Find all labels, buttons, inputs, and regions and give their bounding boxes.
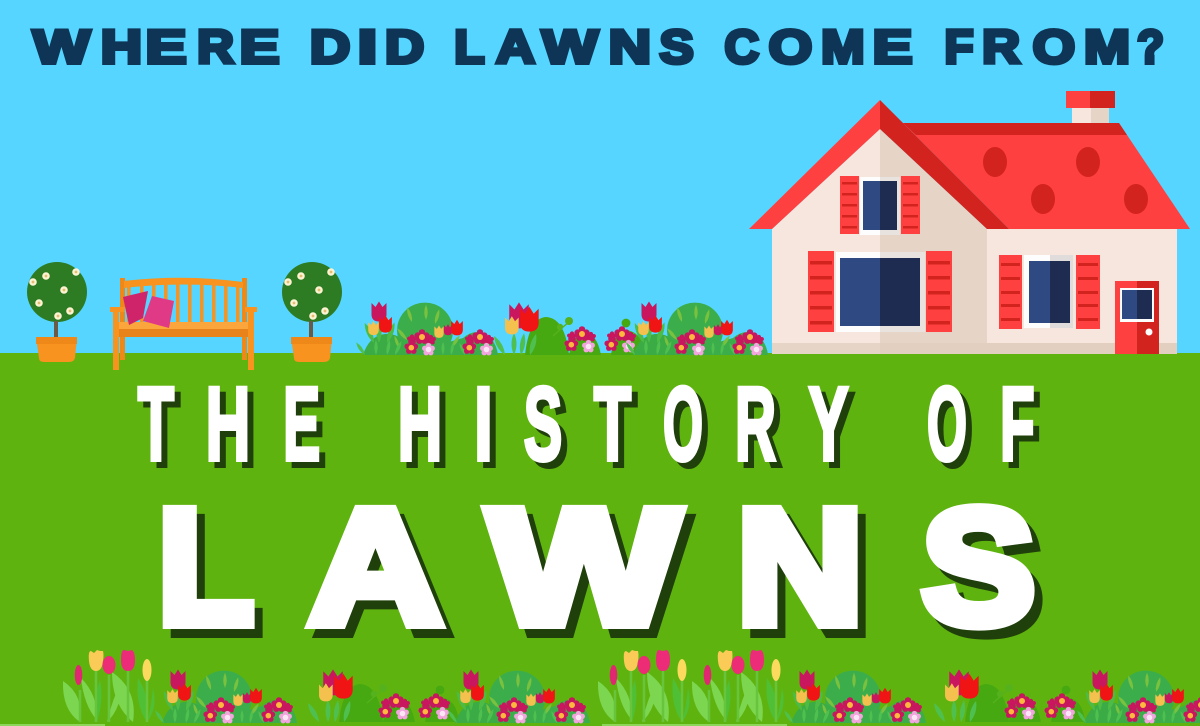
chimney	[1066, 91, 1115, 123]
upper window	[840, 176, 920, 235]
title: where did lawns come from: M	[1084, 21, 1130, 74]
title: where did lawns come from: H	[101, 21, 142, 74]
title: where did lawns come from: W	[33, 21, 90, 74]
subtitle: the history of: H	[398, 366, 442, 483]
subtitle: the history of: O	[927, 366, 967, 483]
title: where did lawns come from: R	[197, 21, 234, 74]
subtitle: the history of: T	[594, 366, 631, 483]
flower bed along the horizon	[355, 302, 768, 356]
flower group centre	[492, 302, 645, 356]
title: where did lawns come from: D	[385, 21, 424, 74]
title: where did lawns come from: E	[146, 21, 186, 74]
subtitle: the history of: E	[283, 366, 320, 483]
main title: lawns: L	[158, 475, 254, 658]
title: where did lawns come from: I	[358, 21, 377, 74]
subtitle: the history of: I	[474, 366, 493, 483]
subtitle: the history of: O	[663, 366, 703, 483]
title: where did lawns come from: E	[873, 21, 912, 74]
subtitle: the history of	[138, 366, 1035, 483]
lower right window	[999, 255, 1100, 329]
tulip bed 3	[692, 650, 784, 722]
title: where did lawns come from: W	[542, 21, 598, 74]
subtitle: the history of: S	[524, 366, 562, 483]
title: where did lawns come from: F	[944, 21, 974, 74]
title: where did lawns come from: N	[609, 21, 651, 74]
sky background	[0, 0, 1200, 353]
bench legs and arms	[110, 307, 257, 370]
house	[749, 91, 1190, 354]
subtitle: the history of: H	[206, 366, 250, 483]
cushions	[123, 291, 174, 328]
house walls	[772, 129, 1177, 354]
gable roof	[749, 100, 1009, 229]
flower group 5	[932, 669, 1085, 723]
main title: lawns: N	[737, 475, 863, 658]
title: where did lawns come from: O	[1033, 21, 1075, 74]
title: where did lawns come from: S	[660, 21, 694, 74]
flower group 1	[154, 670, 297, 724]
flower group 3	[447, 670, 590, 724]
right topiary in pot	[282, 262, 342, 362]
title: where did lawns come from: R	[982, 21, 1020, 74]
subtitle: the history of: F	[1000, 366, 1035, 483]
main roof	[903, 123, 1190, 229]
flower group right	[625, 302, 768, 356]
bottom flower border	[0, 650, 1200, 726]
lawn ground	[0, 353, 1200, 726]
light grass edge centre	[602, 724, 787, 726]
lower left window	[808, 251, 952, 332]
title: where did lawns come from: C	[724, 21, 759, 74]
subtitle: the history of: R	[735, 366, 776, 483]
main title: lawns: S	[922, 475, 1035, 658]
tulip bed 2	[598, 650, 690, 722]
flower group 4	[783, 670, 926, 724]
title: where did lawns come from: L	[454, 21, 485, 74]
door	[1115, 281, 1159, 354]
tulip bed 1	[63, 650, 155, 722]
left topiary in pot	[27, 262, 87, 362]
subtitle: the history of: T	[138, 366, 174, 483]
flower group left	[355, 302, 498, 356]
main title: lawns: A	[309, 475, 442, 658]
title: where did lawns come from: M	[821, 21, 865, 74]
bench back	[120, 278, 247, 360]
title: where did lawns come from: A	[496, 21, 535, 74]
main title: lawns	[158, 475, 1035, 658]
title: where did lawns come from: E	[240, 21, 280, 74]
title: where did lawns come from: D	[310, 21, 350, 74]
title: where did lawns come from: O	[769, 21, 812, 74]
flower group 2	[306, 669, 459, 723]
title: where did lawns come from: ?	[1137, 21, 1164, 74]
flower group 6	[1076, 670, 1200, 724]
light grass edge left	[0, 724, 105, 726]
subtitle: the history of: Y	[808, 366, 848, 483]
bench seat	[119, 322, 249, 337]
main title: lawns: W	[489, 475, 679, 658]
garden bench	[110, 278, 257, 370]
